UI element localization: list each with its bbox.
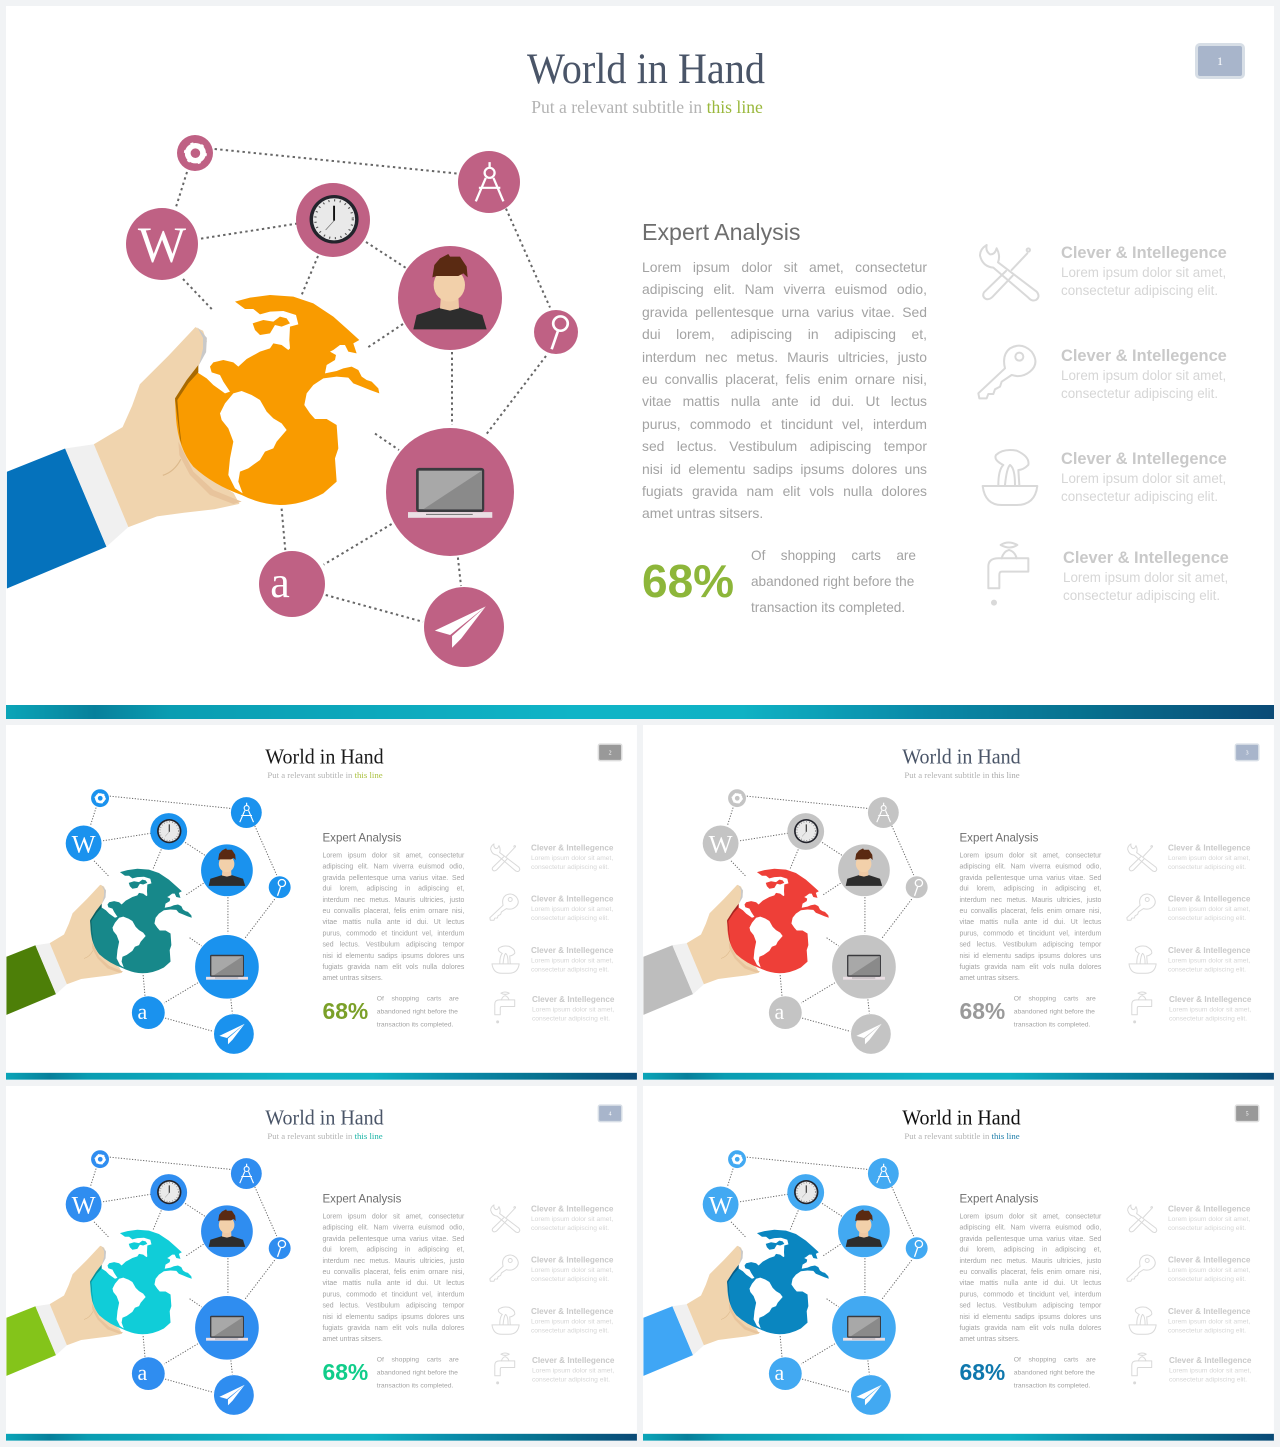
feature: tap: Lorem ipsum dolor sit amet, xyxy=(1063,570,1228,585)
body text: interdum nec metus. Mauris ultricies, justo xyxy=(322,1256,464,1264)
feature: tap xyxy=(1131,992,1252,1024)
heading: Expert Analysis xyxy=(642,219,801,245)
body text xyxy=(959,851,1102,981)
feature: tools: consectetur adipiscing elit. xyxy=(1168,1224,1246,1231)
feature: tools: consectetur adipiscing elit. xyxy=(1061,283,1218,298)
node: a: a xyxy=(774,999,784,1024)
feature: key: Clever & Intellegence xyxy=(1168,1256,1250,1265)
subtitle: Put a relevant subtitle in this line xyxy=(267,1131,383,1141)
feature: tools: consectetur adipiscing elit. xyxy=(531,863,609,870)
globe xyxy=(175,295,379,505)
node: paper plane xyxy=(424,587,504,667)
feature: bowl: Clever & Intellegence xyxy=(1168,1307,1250,1316)
node: paper plane xyxy=(214,1014,254,1054)
node: magnifier xyxy=(534,310,578,354)
body text: gravida pellentesque urna varius vitae. Sed xyxy=(959,873,1101,881)
body text: interdum nec metus. Mauris ultricies, justo xyxy=(322,895,464,903)
body text: adipiscing elit. Nam viverra euismod odio, xyxy=(959,862,1101,870)
feature: tools: consectetur adipiscing elit. xyxy=(1168,863,1246,870)
feature: tools: consectetur adipiscing elit. xyxy=(531,1224,609,1231)
body text: sed lectus. Vestibulum adipiscing tempor xyxy=(322,1301,464,1309)
feature: tap: Lorem ipsum dolor sit amet, xyxy=(532,1006,614,1013)
feature: key: Lorem ipsum dolor sit amet, xyxy=(1061,368,1226,383)
feature: bowl xyxy=(492,946,614,974)
hand xyxy=(6,1246,122,1376)
hand xyxy=(643,885,759,1015)
feature: bowl: Lorem ipsum dolor sit amet, xyxy=(1168,956,1250,964)
page number badge xyxy=(1195,43,1245,79)
body text: adipiscing elit. Nam viverra euismod odio, xyxy=(959,1223,1101,1231)
node: laptop xyxy=(195,1296,259,1360)
body text: adipiscing elit. Nam viverra euismod odio, xyxy=(322,862,464,870)
feature: bowl: consectetur adipiscing elit. xyxy=(531,1326,609,1334)
statistic 68%: transaction its completed. xyxy=(377,1021,453,1028)
node: laptop xyxy=(195,935,259,999)
node: compass xyxy=(868,1158,899,1189)
feature: key: Lorem ipsum dolor sit amet, xyxy=(531,1266,613,1274)
page number badge: 2 xyxy=(609,749,612,756)
feature: tap xyxy=(494,1352,614,1384)
feature: bowl xyxy=(1128,1306,1250,1335)
body text: eu convallis placerat, felis enim ornare nisi, xyxy=(959,907,1101,915)
body text: fugiats gravida nam elit vols nulla dolores xyxy=(322,962,464,970)
feature: tools xyxy=(490,843,614,872)
body text: amet untras sitsers. xyxy=(642,505,763,521)
feature: tap: Lorem ipsum dolor sit amet, xyxy=(532,1367,614,1374)
statistic 68%: Of shopping carts are xyxy=(1014,995,1096,1002)
globe xyxy=(90,869,192,973)
feature: bowl xyxy=(982,449,1227,506)
body text: purus, commodo et tincidunt vel, interdum xyxy=(642,416,927,432)
feature: bowl: Clever & Intellegence xyxy=(531,1307,613,1316)
feature: tools: Clever & Intellegence xyxy=(531,1204,613,1213)
statistic 68%: 68% xyxy=(322,1359,368,1385)
feature: key: consectetur adipiscing elit. xyxy=(531,1275,609,1283)
statistic 68%: 68% xyxy=(322,998,368,1024)
heading: Expert Analysis xyxy=(322,831,401,844)
node: magnifier xyxy=(269,876,291,898)
body text: purus, commodo et tincidunt vel, interdum xyxy=(322,929,464,937)
feature: key xyxy=(489,894,614,922)
title: World in Hand xyxy=(902,745,1021,768)
node: paper plane xyxy=(214,1375,254,1415)
statistic 68% xyxy=(322,995,459,1028)
node: a xyxy=(132,996,165,1029)
body text xyxy=(322,851,464,981)
statistic 68%: 68% xyxy=(642,555,734,607)
body text: amet untras sitsers. xyxy=(322,973,383,981)
feature: key: Clever & Intellegence xyxy=(1061,347,1227,365)
body text: sed lectus. Vestibulum adipiscing tempor xyxy=(322,940,464,948)
feature: tap xyxy=(494,992,614,1024)
body text: purus, commodo et tincidunt vel, interdum xyxy=(959,929,1101,937)
feature: bowl: Clever & Intellegence xyxy=(1168,946,1250,955)
subtitle: Put a relevant subtitle in this line xyxy=(904,1131,1020,1141)
body text: fugiats gravida nam elit vols nulla dolores xyxy=(959,1323,1101,1331)
feature: tools xyxy=(490,1204,614,1233)
feature: tap: consectetur adipiscing elit. xyxy=(1063,588,1220,603)
body text: nisi id elementu sadips ipsums dolores uns xyxy=(322,951,464,959)
node: person xyxy=(398,246,502,350)
body text: gravida pellentesque urna varius vitae. Sed xyxy=(322,1234,464,1242)
footer band xyxy=(643,1434,1274,1441)
feature: key: consectetur adipiscing elit. xyxy=(1061,386,1218,401)
feature: tools: Lorem ipsum dolor sit amet, xyxy=(531,1215,613,1222)
feature: key xyxy=(977,344,1227,401)
body text: sed lectus. Vestibulum adipiscing tempor xyxy=(642,438,927,454)
hand xyxy=(643,1246,759,1376)
panel: slide 4 blue and cyan xyxy=(6,1086,637,1441)
node: clock xyxy=(150,813,187,850)
feature: bowl: Clever & Intellegence xyxy=(531,946,613,955)
feature: tap: Clever & Intellegence xyxy=(1169,1356,1251,1365)
node: compass xyxy=(868,797,899,828)
body text: fugiats gravida nam elit vols nulla dolores xyxy=(959,962,1101,970)
statistic 68%: transaction its completed. xyxy=(377,1382,453,1389)
body text: gravida pellentesque urna varius vitae. Sed xyxy=(959,1234,1101,1242)
statistic 68%: 68% xyxy=(959,1359,1005,1385)
illustration: hand holding globe with network xyxy=(6,789,291,1054)
body text: dui lorem, adipiscing in adipiscing et, xyxy=(959,884,1101,892)
body text: nisi id elementu sadips ipsums dolores uns xyxy=(959,1312,1101,1320)
body text xyxy=(959,1212,1102,1342)
body text: amet untras sitsers. xyxy=(322,1334,383,1342)
statistic 68%: Of shopping carts are xyxy=(751,548,916,563)
body text: interdum nec metus. Mauris ultricies, justo xyxy=(959,895,1101,903)
panel: slide 3 grey and red xyxy=(643,725,1274,1080)
body text: vitae mattis nulla ante id dui. Ut lectus xyxy=(959,918,1101,926)
feature: tap xyxy=(1131,1352,1252,1384)
node: paper plane xyxy=(851,1014,891,1054)
node: gear xyxy=(91,789,109,807)
subtitle: Put a relevant subtitle in this line xyxy=(267,770,383,780)
body text: nisi id elementu sadips ipsums dolores uns xyxy=(642,461,927,477)
node: a: a xyxy=(270,558,290,607)
page number badge xyxy=(1235,743,1260,761)
feature: bowl xyxy=(1128,946,1250,974)
body text: vitae mattis nulla ante id dui. Ut lectus xyxy=(642,393,927,409)
body text: adipiscing elit. Nam viverra euismod odio, xyxy=(642,281,927,297)
node: person xyxy=(201,844,253,896)
node: person xyxy=(838,1205,890,1257)
body text: adipiscing elit. Nam viverra euismod odio, xyxy=(322,1223,464,1231)
page number badge: 5 xyxy=(1246,1110,1249,1117)
node: person xyxy=(838,844,890,896)
heading: Expert Analysis xyxy=(959,1192,1038,1205)
body text: nisi id elementu sadips ipsums dolores uns xyxy=(322,1312,464,1320)
node: W: W xyxy=(138,218,187,274)
feature: tap: consectetur adipiscing elit. xyxy=(1169,1376,1247,1383)
statistic 68%: abandoned right before the xyxy=(1014,1008,1095,1015)
node: a: a xyxy=(137,999,147,1024)
feature: tap: consectetur adipiscing elit. xyxy=(532,1376,610,1383)
node: clock xyxy=(296,183,370,257)
title: World in Hand xyxy=(265,745,384,768)
body text: vitae mattis nulla ante id dui. Ut lectus xyxy=(959,1279,1101,1287)
node: clock xyxy=(787,813,824,850)
node: W: W xyxy=(709,1191,733,1219)
body text: eu convallis placerat, felis enim ornare nisi, xyxy=(322,907,464,915)
node: compass xyxy=(231,1158,262,1189)
node: clock xyxy=(787,1174,824,1211)
hand xyxy=(7,327,239,589)
feature: key: Lorem ipsum dolor sit amet, xyxy=(531,905,613,913)
body text: eu convallis placerat, felis enim ornare nisi, xyxy=(322,1268,464,1276)
feature: key: consectetur adipiscing elit. xyxy=(1168,1275,1246,1283)
feature: key xyxy=(489,1254,614,1283)
feature: bowl: consectetur adipiscing elit. xyxy=(1168,1326,1246,1334)
statistic 68%: transaction its completed. xyxy=(1014,1382,1090,1389)
feature: bowl xyxy=(492,1306,614,1335)
feature: bowl: Clever & Intellegence xyxy=(1061,450,1227,468)
node: W xyxy=(66,826,102,861)
globe xyxy=(727,869,829,973)
body text: Lorem ipsum dolor sit amet, consectetur xyxy=(959,1212,1101,1220)
statistic 68%: abandoned right before the xyxy=(751,574,914,589)
node: person xyxy=(201,1205,253,1257)
statistic 68% xyxy=(642,548,916,615)
subtitle: Put a relevant subtitle in this line xyxy=(531,97,763,117)
node: W xyxy=(703,1187,739,1222)
page number badge: 4 xyxy=(609,1110,612,1117)
page number badge: 3 xyxy=(1246,749,1249,756)
panel: slide 2 blue and teal xyxy=(6,725,637,1080)
feature: bowl: Lorem ipsum dolor sit amet, xyxy=(1061,471,1226,486)
statistic 68%: Of shopping carts are xyxy=(1014,1356,1096,1363)
title: World in Hand xyxy=(902,1106,1021,1129)
body text: nisi id elementu sadips ipsums dolores uns xyxy=(959,951,1101,959)
node: magnifier xyxy=(906,876,928,898)
node: W: W xyxy=(709,830,733,858)
page number badge xyxy=(598,743,623,761)
illustration: hand holding globe with network xyxy=(643,1150,928,1415)
feature: tools: Lorem ipsum dolor sit amet, xyxy=(1168,854,1250,861)
feature: tools: Clever & Intellegence xyxy=(531,843,613,852)
feature: tap: Clever & Intellegence xyxy=(1063,549,1229,567)
node: W: W xyxy=(72,1191,96,1219)
body text: vitae mattis nulla ante id dui. Ut lectus xyxy=(322,918,464,926)
body text: interdum nec metus. Mauris ultricies, justo xyxy=(642,349,927,365)
illustration: hand holding globe with network xyxy=(644,789,928,1054)
body text xyxy=(642,259,927,521)
feature: tools: Lorem ipsum dolor sit amet, xyxy=(1061,265,1226,280)
feature: tap: consectetur adipiscing elit. xyxy=(1169,1015,1247,1022)
feature: tap: Clever & Intellegence xyxy=(1169,995,1251,1004)
feature: tap: Lorem ipsum dolor sit amet, xyxy=(1169,1006,1251,1013)
feature: bowl: consectetur adipiscing elit. xyxy=(531,965,609,973)
node: gear xyxy=(728,789,746,807)
title: World in Hand xyxy=(265,1106,384,1129)
statistic 68%: Of shopping carts are xyxy=(377,995,459,1002)
statistic 68% xyxy=(959,1356,1096,1389)
feature: tools: Clever & Intellegence xyxy=(1061,244,1227,262)
footer band xyxy=(6,705,1274,719)
node: W xyxy=(126,208,198,280)
node: W xyxy=(66,1187,102,1222)
node: compass xyxy=(231,797,262,828)
node: a xyxy=(259,551,325,617)
body text: purus, commodo et tincidunt vel, interdum xyxy=(959,1290,1101,1298)
node: clock xyxy=(150,1174,187,1211)
body text: amet untras sitsers. xyxy=(959,973,1020,981)
feature: key: consectetur adipiscing elit. xyxy=(1168,914,1246,922)
feature: key: Lorem ipsum dolor sit amet, xyxy=(1168,905,1250,913)
body text: eu convallis placerat, felis enim ornare nisi, xyxy=(959,1268,1101,1276)
feature: tap xyxy=(987,542,1229,606)
feature: tools: Clever & Intellegence xyxy=(1168,1204,1250,1213)
title: World in Hand xyxy=(527,46,765,93)
node: W xyxy=(703,826,739,861)
statistic 68%: abandoned right before the xyxy=(1014,1369,1095,1376)
body text: amet untras sitsers. xyxy=(959,1334,1020,1342)
body text: interdum nec metus. Mauris ultricies, justo xyxy=(959,1256,1101,1264)
body text: eu convallis placerat, felis enim ornare nisi, xyxy=(642,371,927,387)
node: gear xyxy=(91,1150,109,1168)
footer band xyxy=(643,1073,1274,1080)
panel: main slide 1 xyxy=(6,6,1274,719)
feature: key xyxy=(1126,894,1250,922)
globe xyxy=(90,1230,192,1334)
body text: gravida pellentesque urna varius vitae. Sed xyxy=(322,873,464,881)
node: magnifier xyxy=(269,1237,291,1259)
statistic 68%: abandoned right before the xyxy=(377,1008,458,1015)
statistic 68%: Of shopping carts are xyxy=(377,1356,459,1363)
page number badge xyxy=(598,1104,623,1122)
node: a xyxy=(132,1357,165,1390)
body text: dui lorem, adipiscing in adipiscing et, xyxy=(959,1245,1101,1253)
feature: tools xyxy=(1127,1204,1250,1233)
heading: Expert Analysis xyxy=(322,1192,401,1205)
statistic 68%: 68% xyxy=(959,998,1005,1024)
feature: tools: Lorem ipsum dolor sit amet, xyxy=(1168,1215,1250,1222)
feature: key: Clever & Intellegence xyxy=(531,895,613,904)
feature: key xyxy=(1126,1254,1250,1283)
illustration: hand holding globe with network xyxy=(6,135,578,667)
node: gear xyxy=(728,1150,746,1168)
body text: dui lorem, adipiscing in adipiscing et, xyxy=(322,1245,464,1253)
feature: bowl: Lorem ipsum dolor sit amet, xyxy=(531,1317,613,1325)
page number badge xyxy=(1235,1104,1260,1122)
statistic 68%: transaction its completed. xyxy=(1014,1021,1090,1028)
body text: Lorem ipsum dolor sit amet, consectetur xyxy=(642,259,927,275)
illustration: hand holding globe with network xyxy=(6,1150,291,1415)
body text: purus, commodo et tincidunt vel, interdum xyxy=(322,1290,464,1298)
statistic 68% xyxy=(959,995,1096,1028)
body text: sed lectus. Vestibulum adipiscing tempor xyxy=(959,940,1101,948)
feature: tools: Lorem ipsum dolor sit amet, xyxy=(531,854,613,861)
feature: bowl: Lorem ipsum dolor sit amet, xyxy=(1168,1317,1250,1325)
feature: bowl: consectetur adipiscing elit. xyxy=(1061,489,1218,504)
feature: key: consectetur adipiscing elit. xyxy=(531,914,609,922)
panel: slide 5 sky blue xyxy=(643,1086,1274,1441)
body text: Lorem ipsum dolor sit amet, consectetur xyxy=(322,1212,464,1220)
feature: tools xyxy=(979,244,1227,302)
statistic 68% xyxy=(322,1356,459,1389)
statistic 68%: abandoned right before the xyxy=(377,1369,458,1376)
feature: key: Clever & Intellegence xyxy=(1168,895,1250,904)
body text: sed lectus. Vestibulum adipiscing tempor xyxy=(959,1301,1101,1309)
body text: dui lorem, adipiscing in adipiscing et, xyxy=(322,884,464,892)
body text: Lorem ipsum dolor sit amet, consectetur xyxy=(322,851,464,859)
node: a xyxy=(769,1357,802,1390)
feature: tap: Clever & Intellegence xyxy=(532,995,614,1004)
body text: dui lorem, adipiscing in adipiscing et, xyxy=(642,326,927,342)
feature: bowl: Lorem ipsum dolor sit amet, xyxy=(531,956,613,964)
node: laptop xyxy=(386,428,514,556)
node: paper plane xyxy=(851,1375,891,1415)
node: a: a xyxy=(774,1360,784,1385)
body text: fugiats gravida nam elit vols nulla dolores xyxy=(642,483,927,499)
heading: Expert Analysis xyxy=(959,831,1038,844)
node: gear xyxy=(177,135,213,171)
footer band xyxy=(6,1073,637,1080)
node: a: a xyxy=(137,1360,147,1385)
node: laptop xyxy=(832,1296,896,1360)
statistic 68%: transaction its completed. xyxy=(751,600,905,615)
hand xyxy=(6,885,122,1015)
body text xyxy=(322,1212,464,1342)
node: magnifier xyxy=(906,1237,928,1259)
feature: tools xyxy=(1127,843,1250,872)
body text: fugiats gravida nam elit vols nulla dolores xyxy=(322,1323,464,1331)
globe xyxy=(727,1230,829,1334)
feature: tap: Lorem ipsum dolor sit amet, xyxy=(1169,1367,1251,1374)
feature: bowl: consectetur adipiscing elit. xyxy=(1168,965,1246,973)
feature: tools: Clever & Intellegence xyxy=(1168,843,1250,852)
subtitle: Put a relevant subtitle in this line xyxy=(904,770,1020,780)
body text: vitae mattis nulla ante id dui. Ut lectus xyxy=(322,1279,464,1287)
node: compass xyxy=(458,151,520,213)
feature: key: Clever & Intellegence xyxy=(531,1256,613,1265)
feature: tap: Clever & Intellegence xyxy=(532,1356,614,1365)
body text: Lorem ipsum dolor sit amet, consectetur xyxy=(959,851,1101,859)
feature: tap: consectetur adipiscing elit. xyxy=(532,1015,610,1022)
footer band xyxy=(6,1434,637,1441)
node: W: W xyxy=(72,830,96,858)
body text: gravida pellentesque urna varius vitae. Sed xyxy=(642,304,927,320)
node: a xyxy=(769,996,802,1029)
node: laptop xyxy=(832,935,896,999)
page number badge: 1 xyxy=(1217,54,1223,68)
feature: key: Lorem ipsum dolor sit amet, xyxy=(1168,1266,1250,1274)
